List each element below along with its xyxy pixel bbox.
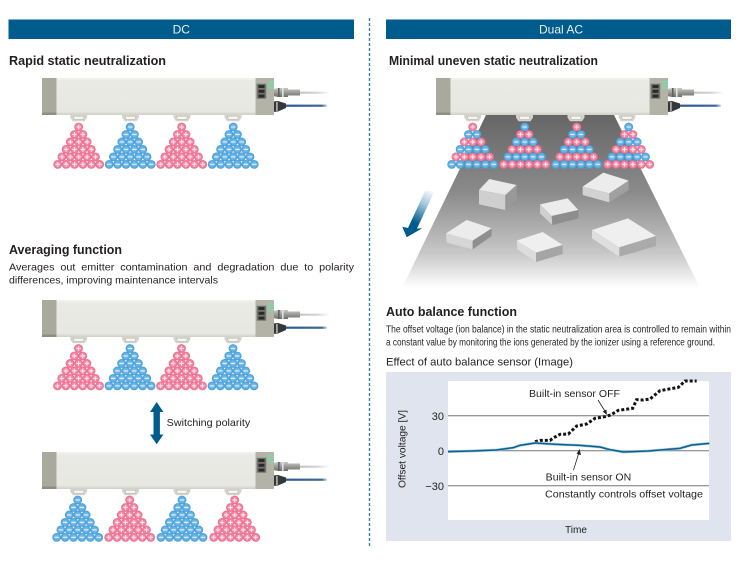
axis tick labels <box>425 411 444 493</box>
panel: Dual AC column <box>386 20 731 541</box>
note: Constantly controls offset voltage: Constantly controls offset voltage <box>545 488 703 500</box>
ionizer: dual AC <box>436 78 724 121</box>
header bar: DC: DC <box>173 22 190 36</box>
callout: Built-in sensor OFF <box>529 388 620 415</box>
divider: dashed centre line <box>368 18 370 548</box>
ion triangles: polarity state one <box>53 344 258 390</box>
ion triangles: alternating plus and minus <box>53 123 259 169</box>
series: built-in sensor OFF <box>535 381 697 442</box>
axis tick labels: 30 <box>432 411 444 423</box>
ionizer: rapid neutralization <box>42 78 330 121</box>
axis label: Time: Time <box>565 524 587 536</box>
ionizer: polarity state two <box>42 452 330 495</box>
header bar: Dual AC: Dual AC <box>539 22 583 36</box>
heading: Auto balance function: Auto balance function <box>386 304 517 319</box>
conveyor belt with workpieces <box>402 115 700 288</box>
chart title: Effect of auto balance sensor (Image) <box>386 356 573 368</box>
axis tick labels: 0 <box>438 446 444 458</box>
series: built-in sensor ON <box>448 443 709 452</box>
axis tick labels: −30 <box>425 481 444 493</box>
text block: averaging description: Averages out emitter contamination and degradation due to polarity <box>9 262 355 274</box>
heading: Rapid static neutralization: Rapid static neutralization <box>9 53 166 68</box>
text block: averaging description: differences, improving maintenance intervals <box>9 274 218 286</box>
panel: DC column <box>8 20 355 542</box>
text block: auto balance description <box>386 324 731 348</box>
ion triangles: polarity state two <box>52 496 260 542</box>
arrow: conveyor direction <box>402 191 435 237</box>
arrow: switching polarity double arrow <box>150 402 163 444</box>
label: Switching polarity: Switching polarity <box>167 417 251 429</box>
ionizer: polarity state one <box>42 300 330 343</box>
heading: Minimal uneven static neutralization: Minimal uneven static neutralization <box>389 53 598 68</box>
workpieces <box>446 173 656 262</box>
text block: averaging description <box>9 262 355 286</box>
axis label: Offset voltage [V]: Offset voltage [V] <box>396 410 408 488</box>
callout: Built-in sensor OFF: Built-in sensor OFF <box>529 388 620 400</box>
callout: Built-in sensor ON: Built-in sensor ON <box>546 472 631 484</box>
heading: Averaging function: Averaging function <box>9 242 122 257</box>
callout: Built-in sensor ON <box>546 449 631 484</box>
ion triangles: mixed polarity <box>447 123 654 169</box>
header bar: DC <box>8 20 354 39</box>
line chart: offset voltage over time <box>386 372 731 541</box>
header bar: Dual AC <box>386 20 731 39</box>
